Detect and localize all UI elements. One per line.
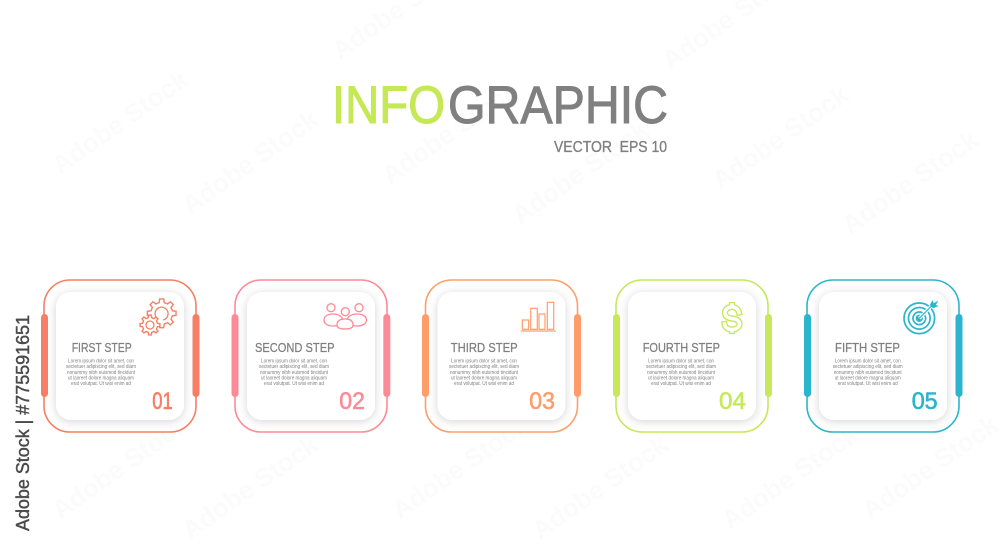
title: INFO	[332, 76, 445, 135]
text: Adobe Stock	[176, 104, 324, 220]
body text: nonummy nibh euismod tincidunt	[834, 370, 902, 376]
icon: target	[904, 300, 938, 334]
body text	[646, 358, 716, 387]
body text: sectetuer adipiscing elit, sed diam	[646, 364, 716, 370]
panel: fourth step	[613, 280, 772, 432]
body text	[833, 358, 903, 387]
icon: dollar	[724, 305, 740, 331]
body text: erat volutpat. Ut wisi enim ad	[71, 381, 131, 387]
body text: nonummy nibh euismod tincidunt	[647, 370, 716, 376]
panel: fifth step	[804, 280, 962, 432]
text: Adobe Stock	[176, 429, 324, 545]
body text: Lorem ipsum dolor sit amet, con	[835, 358, 901, 364]
heading: FIRST STEP	[72, 341, 132, 355]
title	[332, 76, 668, 135]
heading: SECOND STEP	[255, 341, 334, 355]
text: Adobe Stock	[706, 79, 854, 195]
body text: ut laoreet dolore magna aliquam	[451, 375, 517, 381]
body text: Lorem ipsum dolor sit amet, con	[648, 358, 714, 364]
body text: Lorem ipsum dolor sit amet, con	[68, 358, 134, 364]
body text: sectetuer adipiscing elit, sed diam	[66, 364, 136, 370]
body text: erat volutpat. Ut wisi enim ad	[651, 381, 711, 387]
body text: sectetuer adipiscing elit, sed diam	[833, 364, 903, 370]
panel: first step	[41, 280, 200, 432]
heading: FIFTH STEP	[835, 341, 900, 355]
text: Adobe Stock	[716, 419, 864, 535]
body text: nonummy nibh euismod tincidunt	[67, 370, 136, 376]
text: Adobe Stock	[836, 124, 984, 240]
number: 04	[719, 388, 746, 415]
body text: Lorem ipsum dolor sit amet, con	[261, 358, 327, 364]
title: GRAPHIC	[448, 76, 668, 135]
text: Adobe Stock	[46, 64, 194, 180]
text: Adobe Stock	[46, 409, 194, 525]
body text	[66, 358, 136, 387]
body text: erat volutpat. Ut wisi enim ad	[838, 381, 898, 387]
body text	[449, 358, 519, 387]
panel: third step	[422, 280, 581, 432]
text: Adobe Stock	[376, 74, 524, 190]
body text: Lorem ipsum dolor sit amet, con	[451, 358, 517, 364]
heading: THIRD STEP	[451, 341, 518, 355]
text: Adobe Stock	[526, 429, 674, 545]
number: 05	[912, 388, 938, 415]
heading: FOURTH STEP	[643, 341, 720, 355]
body text: ut laoreet dolore magna aliquam	[648, 375, 714, 381]
body text: erat volutpat. Ut wisi enim ad	[454, 381, 514, 387]
icon: people	[324, 304, 366, 329]
body text: ut laoreet dolore magna aliquam	[261, 375, 327, 381]
body text: nonummy nibh euismod tincidunt	[260, 370, 329, 376]
number: 01	[152, 388, 173, 415]
icon: gears	[140, 299, 176, 335]
body text: erat volutpat. Ut wisi enim ad	[264, 381, 324, 387]
body text: nonummy nibh euismod tincidunt	[450, 370, 519, 376]
text: Adobe Stock	[386, 409, 534, 525]
subtitle: VECTOR EPS 10	[554, 139, 667, 156]
body text: ut laoreet dolore magna aliquam	[835, 375, 901, 381]
text: Adobe Stock	[856, 409, 1000, 525]
number: 02	[339, 388, 365, 415]
body text: ut laoreet dolore magna aliquam	[68, 375, 134, 381]
number: 03	[529, 388, 555, 415]
body text: sectetuer adipiscing elit, sed diam	[259, 364, 329, 370]
icon: bar chart	[521, 302, 556, 331]
body text: sectetuer adipiscing elit, sed diam	[449, 364, 519, 370]
text: Adobe Stock	[506, 114, 654, 230]
side credit: Adobe Stock | #775591651	[13, 315, 33, 531]
panel: second step	[232, 280, 390, 432]
body text	[259, 358, 329, 387]
